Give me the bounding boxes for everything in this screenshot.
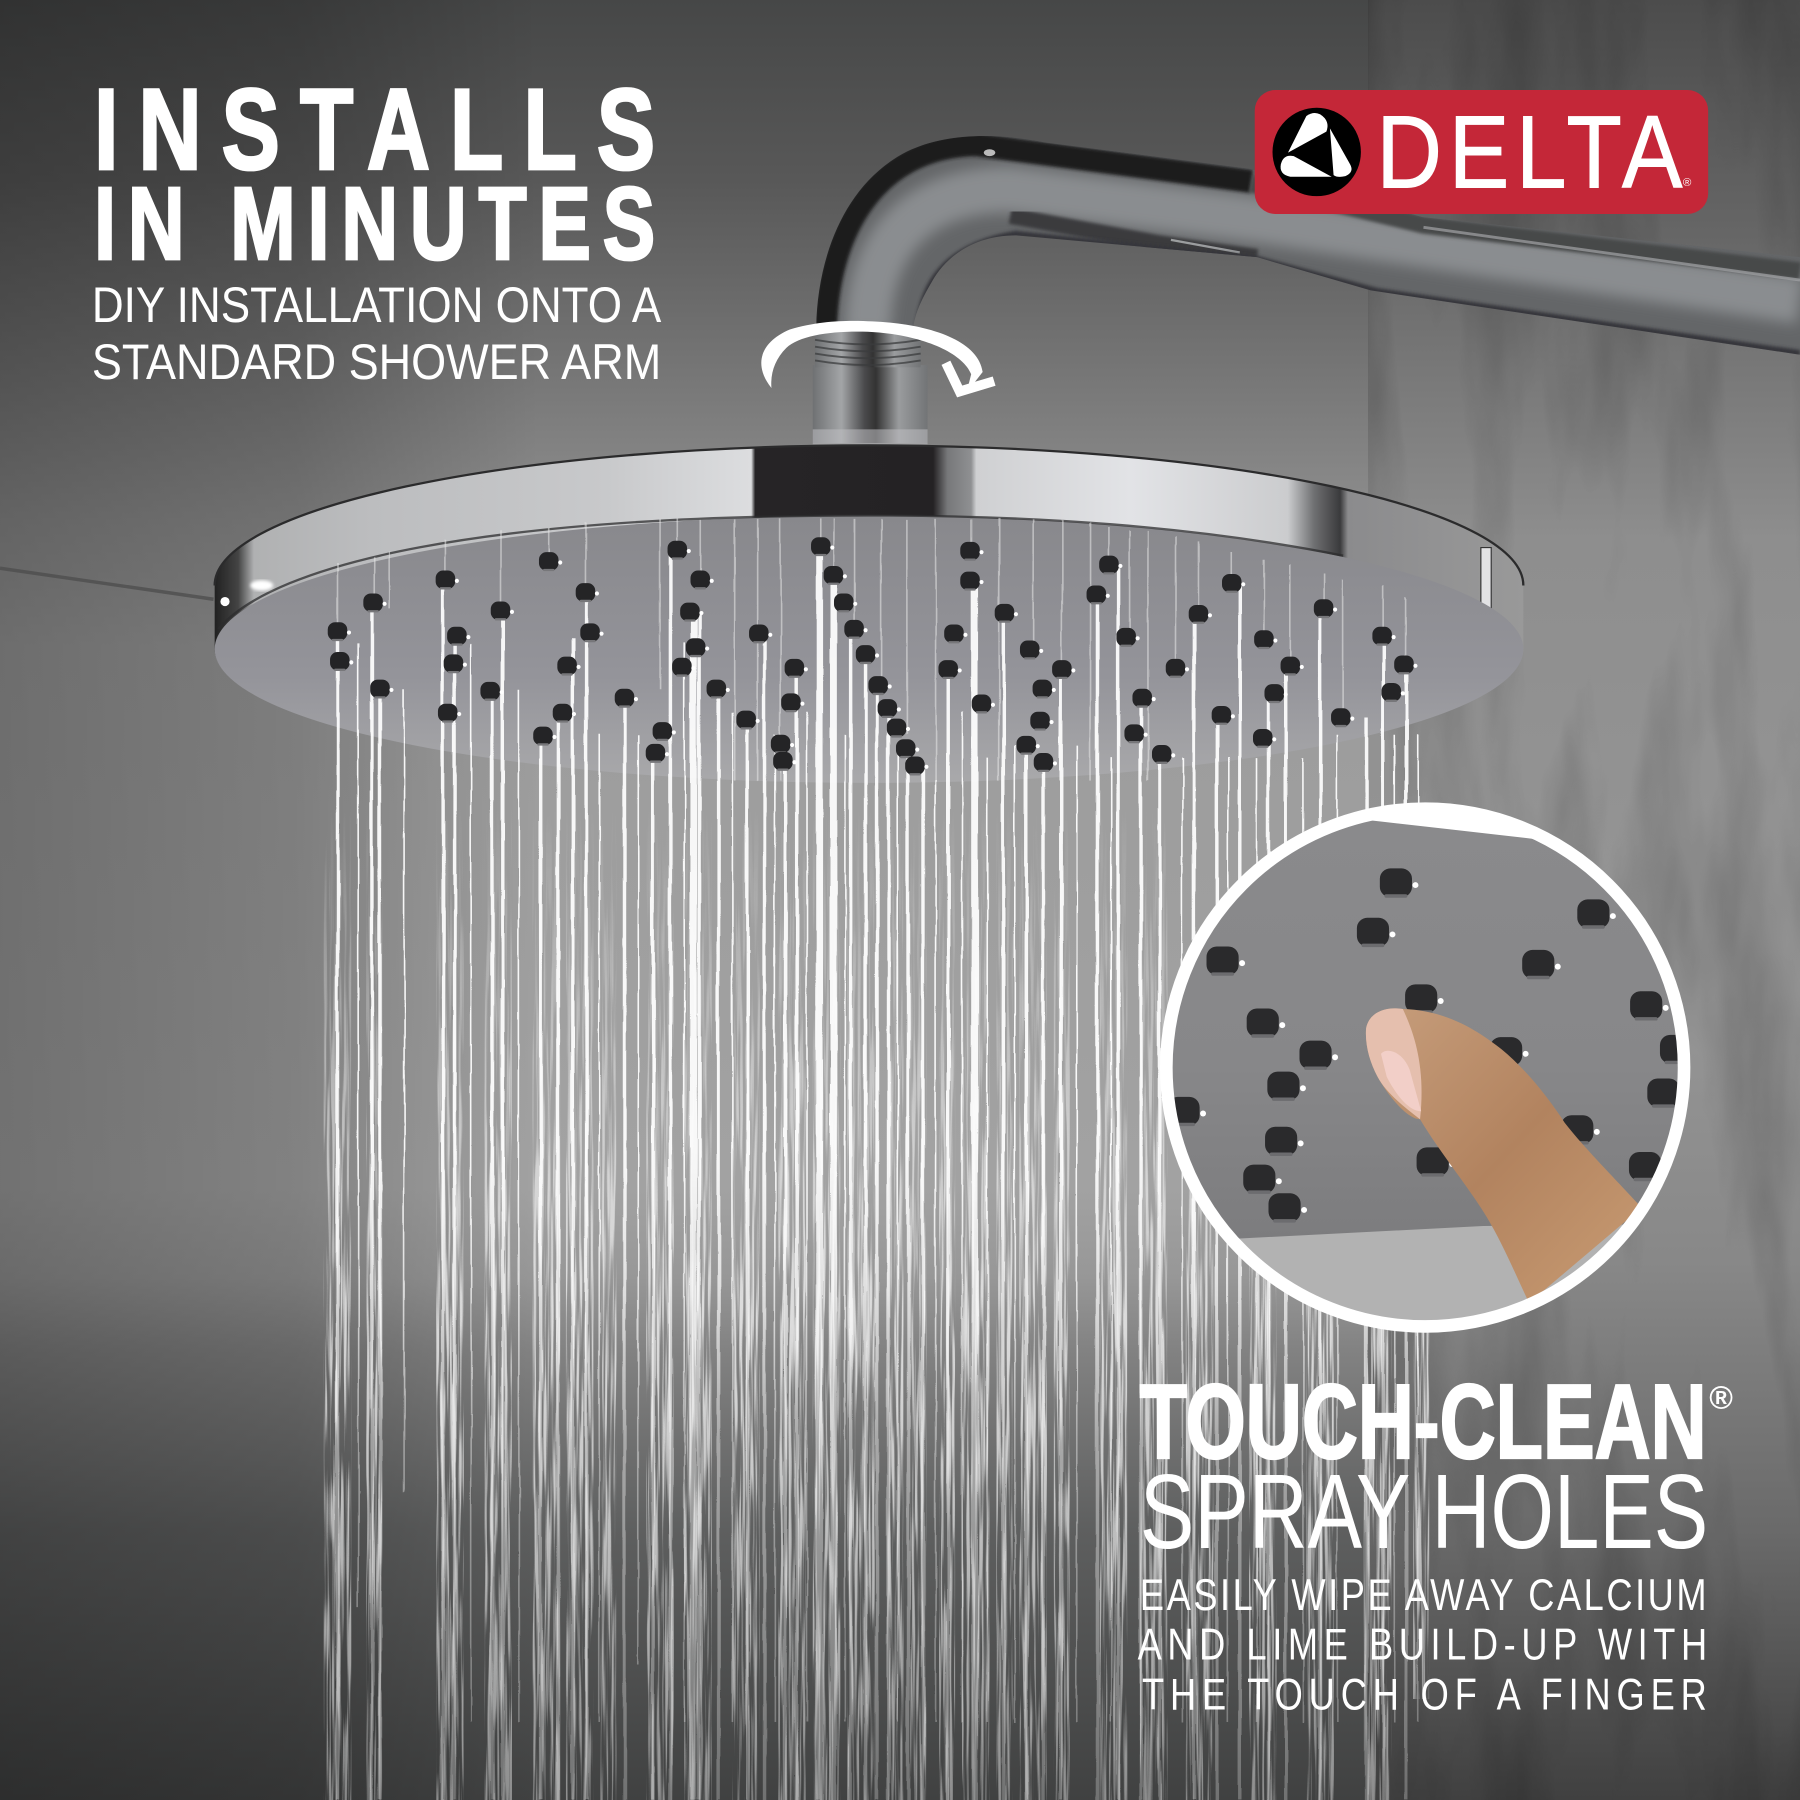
heading: touch-clean spray holes: ® <box>1709 1380 1733 1416</box>
text: touch-clean description: EASILY WIPE AWAY CALCIUM <box>1140 1570 1707 1620</box>
logo: Delta: ® <box>1683 177 1692 189</box>
text: touch-clean description: THE TOUCH OF A FINGER <box>1142 1669 1707 1719</box>
shower head rim <box>215 445 1523 782</box>
heading: touch-clean spray holes <box>1140 1363 1733 1571</box>
shower arm <box>816 136 1800 355</box>
text: DIY installation description: DIY INSTALLATION ONTO A <box>92 276 661 333</box>
logo: Delta: DELTA <box>1376 94 1683 210</box>
headline: installs in minutes: IN MINUTES <box>94 167 655 281</box>
logo: Delta <box>1255 90 1708 214</box>
frayed water spray <box>338 804 1421 1800</box>
threaded neck and collar <box>813 326 928 444</box>
water streams <box>338 549 1421 1800</box>
shower head face plate <box>215 515 1523 783</box>
spray nozzles <box>328 537 1418 775</box>
headline: installs in minutes <box>94 65 655 281</box>
thin water lines on face plate <box>338 519 1405 781</box>
text: touch-clean description: AND LIME BUILD-UP WITH <box>1138 1619 1707 1670</box>
finger <box>1366 1008 1642 1303</box>
text: DIY installation description <box>92 276 661 390</box>
callout: touch-clean close-up circle <box>1159 792 1699 1343</box>
icon: Delta triangle mark <box>1273 108 1361 196</box>
text: touch-clean description <box>1138 1570 1707 1719</box>
text: DIY installation description: STANDARD SHOWER ARM <box>92 333 661 390</box>
icon: rotation arrow <box>761 321 994 393</box>
headline: installs in minutes: INSTALLS <box>94 65 655 194</box>
